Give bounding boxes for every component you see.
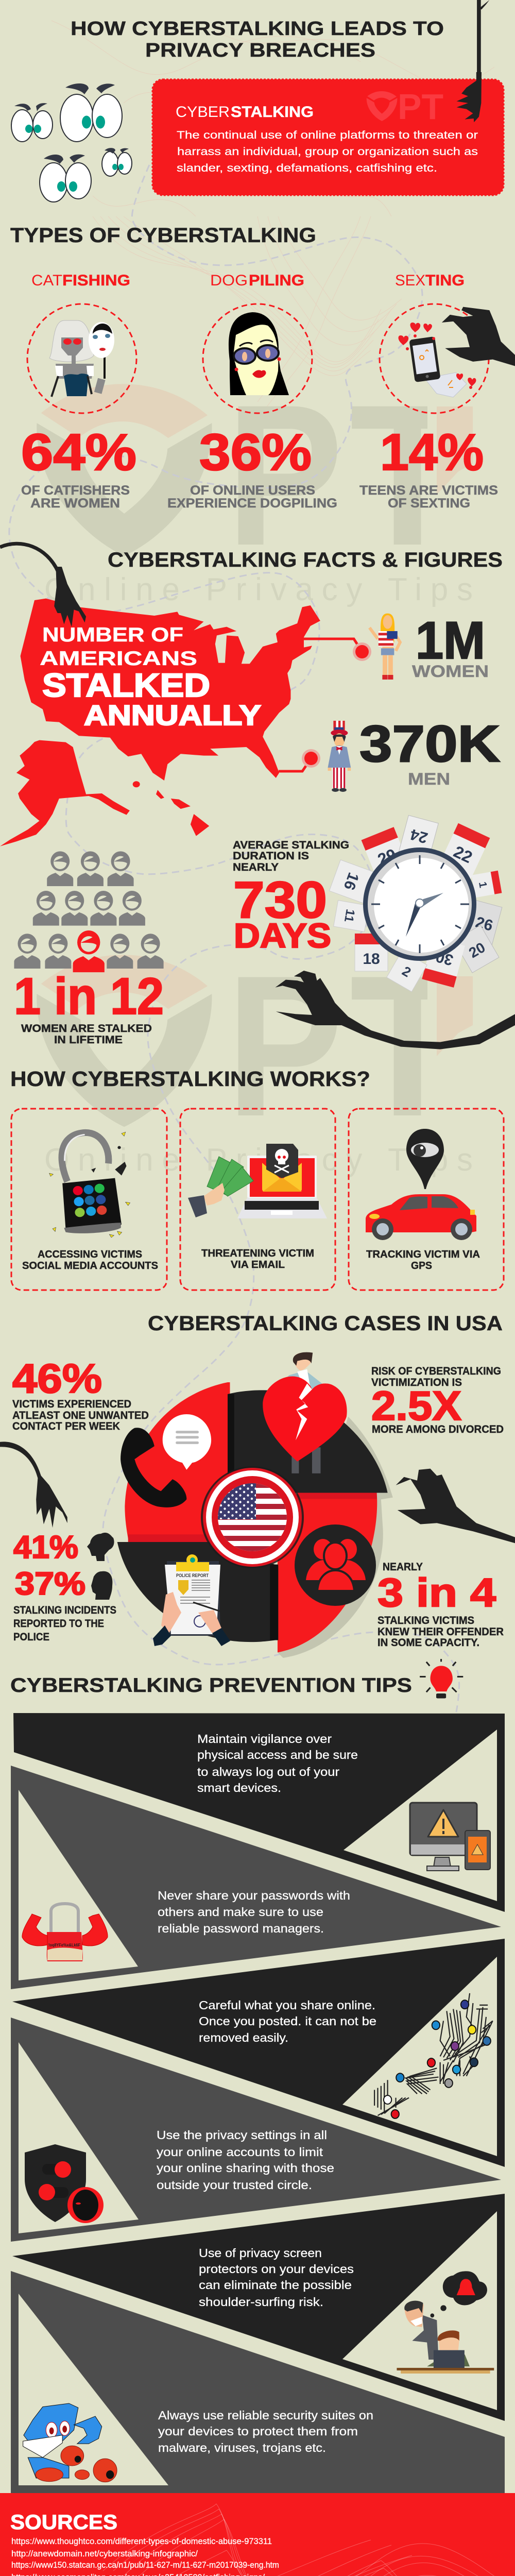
stat: 3 in 4: STALKING VICTIMS [377, 1615, 474, 1626]
panel: tip 5: Use of privacy screen [199, 2246, 322, 2260]
panel: sources: https://www.thoughtco.com/different-types-of-domestic-abuse-973311 [11, 2536, 272, 2546]
panel: tip 6 [11, 2271, 505, 2494]
stat: 3 in 4: IN SOME CAPACITY. [377, 1637, 479, 1649]
icon: privacy shield with toggles and mask [25, 2144, 104, 2223]
panel: tip 3 [12, 1939, 505, 2167]
panel: tip 3: Once you posted. it can not be [199, 2014, 376, 2028]
stat: 2.5X: MORE AMONG DIVORCED [372, 1423, 504, 1435]
icon: clock with calendars: 24 [408, 825, 430, 846]
icon: uncle sam figure [328, 721, 351, 792]
watermark: first OPT logo [37, 363, 473, 587]
icon: sexting phone [380, 304, 489, 413]
panel: cyberstalking definition: PT [398, 87, 443, 127]
panel: sources: http://anewdomain.net/cyberstalking-infographic/ [11, 2549, 198, 2558]
panel: tip 1 [13, 1713, 505, 1912]
icon: angry eyes group [11, 83, 132, 202]
panel: tip 1: Maintain vigilance over [197, 1732, 332, 1745]
panel: tip 2: Never share your passwords with [158, 1889, 350, 1902]
panel: sources: SOURCES [10, 2511, 117, 2534]
stat: 2.5X: VICTIMIZATION IS [371, 1377, 462, 1388]
panel: cyberstalking definition [152, 79, 504, 195]
panel: tip 6: Always use reliable security suites on [158, 2409, 373, 2422]
icon: clock with calendars: 2 [400, 963, 414, 980]
panel: tip 4: outside your trusted circle. [157, 2178, 312, 2192]
pointer: men [279, 749, 320, 771]
icon: woman head silhouette [87, 1533, 114, 1561]
panel: tip 4: your online sharing with those [157, 2161, 334, 2175]
pointer: women [304, 639, 371, 661]
icon: shoulder surfer [397, 2271, 494, 2374]
title [71, 18, 444, 61]
panel: cyberstalking definition: The continual use of online platforms to threaten or [177, 129, 478, 141]
icon: US flag badge [201, 1466, 304, 1568]
stat: 370K men: MEN [408, 770, 450, 788]
icon: speech bubble [163, 1414, 211, 1470]
stat: 14 percent [359, 423, 498, 511]
map caption: NUMBER OF [42, 624, 183, 646]
icon: dogpiling woman [203, 304, 312, 413]
watermark: first OPT logo: T [350, 363, 465, 587]
panel: accessing accounts: SOCIAL MEDIA ACCOUNTS [22, 1260, 158, 1272]
stat: 3 in 4: KNEW THEIR OFFENDER [377, 1626, 504, 1638]
icon: clock with calendars: 22 [451, 842, 475, 867]
stat: 36 percent: 36% [199, 423, 312, 481]
heading: facts and figures: CYBERSTALKING FACTS & FIGURES [108, 549, 503, 571]
watermark: first OPT logo: P [227, 363, 343, 587]
icon: claw under clock [275, 971, 515, 1049]
type heading: dogpiling: DOG [210, 272, 248, 289]
panel: tip 3: Careful what you share online. [199, 1998, 375, 2012]
stat: 36 percent [167, 423, 337, 511]
stat: 1 in 12: IN LIFETIME [54, 1034, 123, 1046]
icon: telephone handset [121, 1428, 186, 1507]
stat: 3 in 4: NEARLY [383, 1561, 423, 1573]
panel: tip 2: others and make sure to use [158, 1905, 323, 1919]
stat: 1M women: 1M [416, 611, 485, 670]
stat: 36 percent: OF ONLINE USERS [190, 483, 315, 498]
stat: 64 percent: 64% [21, 423, 136, 481]
panel: cyberstalking definition: CYBER [176, 104, 230, 121]
stat: 2.5X: RISK OF CYBERSTALKING [371, 1365, 501, 1377]
watermark: second OPT logo: T [350, 934, 465, 1158]
stat: 1 in 12: WOMEN ARE STALKED [21, 1023, 152, 1035]
stat: 36 percent: EXPERIENCE DOGPILING [167, 496, 337, 511]
icon: clock with calendars [329, 815, 502, 992]
icon: clock with calendars: 18 [363, 951, 380, 968]
icon: light bulb [420, 1659, 463, 1699]
stat: 14 percent: OF SEXTING [388, 496, 470, 511]
watermark: first site name: Online Privacy Tips [44, 572, 473, 607]
panel: tip 5: shoulder-surfing risk. [199, 2295, 323, 2309]
title: HOW CYBERSTALKING LEADS TO [71, 18, 444, 40]
panel: tip 1: smart devices. [197, 1781, 281, 1794]
panel: tip 2: reliable password managers. [158, 1922, 324, 1935]
map caption: STALKED [42, 667, 210, 704]
panel: threatening via email: THREATENING VICTIM [201, 1248, 314, 1259]
panel: tip 4: Use the privacy settings in all [157, 2128, 327, 2142]
panel: tip 5: protectors on your devices [199, 2262, 354, 2276]
panel: tip 4 [11, 2018, 501, 2242]
stat: 14 percent: 14% [380, 423, 484, 481]
type heading: catfishing [31, 272, 130, 289]
icon: monitor and phone warning [410, 1803, 490, 1871]
panel: tip 5: can eliminate the possible [199, 2278, 352, 2292]
stat: 64 percent: OF CATFISHERS [21, 483, 130, 498]
panel: cyberstalking definition: harrass an individual, group or organization such as [177, 146, 478, 158]
panel: sources: https://www150.statcan.gc.ca/n1/pub/11-627-m/11-627-m2017039-eng.htm [11, 2560, 279, 2570]
panel: tracking via GPS: GPS [411, 1260, 432, 1272]
panel: tip 1: physical access and be sure [197, 1748, 358, 1761]
stat: 730 days: NEARLY [233, 861, 279, 873]
panel: tracking via GPS: TRACKING VICTIM VIA [366, 1249, 480, 1260]
icon: police report clipboard [153, 1554, 230, 1646]
stat: police reports: 37% [15, 1566, 85, 1602]
watermark: second site name: Online Privacy Tips [44, 1142, 473, 1178]
icon: catfishing robot with mask [27, 304, 136, 413]
panel: cyberstalking definition: STALKING [231, 104, 314, 121]
stat: 2.5X: 2.5X [371, 1383, 461, 1429]
panel: threatening via email [180, 1109, 335, 1290]
icon: security robot and bugs [23, 2403, 117, 2482]
icon: claw right [396, 1469, 515, 1543]
chart: quadrant disc [117, 1352, 393, 1658]
stat: 64 percent [21, 423, 136, 511]
panel: tip 1: to always log out of your [197, 1765, 339, 1778]
stat: 46 percent [12, 1355, 149, 1432]
stat: 730 days [233, 839, 349, 955]
icon: woman figure [370, 614, 400, 680]
stat: police reports: 41% [13, 1530, 78, 1565]
watermark: second OPT logo [37, 934, 473, 1158]
panel: tip 5 [12, 2194, 505, 2421]
stat: 46 percent: ATLEAST ONE UNWANTED [12, 1410, 149, 1421]
icon: laptop with threat envelope and money [188, 1144, 327, 1218]
map caption [40, 624, 261, 731]
stat: police reports: STALKING INCIDENTS [13, 1604, 116, 1616]
icon: broken padlock [49, 1132, 130, 1238]
panel: tip 2 [11, 1766, 501, 1989]
icon: clock with calendars: 30 [434, 948, 455, 969]
panel: tip 3: removed easily. [199, 2031, 288, 2044]
icon: clock with calendars: 26 [474, 913, 495, 935]
type heading: sexting: TING [425, 272, 465, 289]
type heading: sexting [395, 272, 465, 289]
icon: man head silhouette [91, 1571, 112, 1600]
title: PRIVACY BREACHES [145, 40, 375, 61]
icon: black claw [442, 307, 515, 366]
icon: claw on map [0, 544, 86, 627]
icon: clock with calendars: 16 [340, 870, 362, 892]
heading: prevention tips: CYBERSTALKING PREVENTION TIPS [10, 1674, 412, 1697]
stat: 14 percent: TEENS ARE VICTIMS [359, 483, 498, 498]
watermark: second OPT logo: P [227, 934, 343, 1158]
icon: claw left [0, 1442, 67, 1528]
map caption: ANNUALLY [84, 699, 261, 731]
pictogram: women figures [14, 851, 164, 972]
icon: clock with calendars: 11 [341, 908, 357, 923]
stat: 2.5X [371, 1365, 504, 1435]
stat: 730 days: DAYS [234, 917, 331, 955]
panel: accessing accounts [11, 1109, 167, 1290]
stat: 3 in 4 [377, 1561, 504, 1649]
stat: 64 percent: ARE WOMEN [30, 496, 120, 511]
stat: 370K men: 370K [359, 715, 500, 773]
icon: police report clipboard: POLICE REPORT [176, 1573, 209, 1578]
type heading: sexting: SEX [395, 272, 425, 289]
icon: clock with calendars: 20 [466, 939, 488, 961]
icon: circuit foot [374, 1993, 493, 2119]
type heading: catfishing: FISHING [62, 272, 130, 289]
stat: 1 in 12: 1 in 12 [14, 968, 164, 1025]
icon: clock with calendars: 1 [476, 881, 489, 889]
panel: tip 6: your devices to protect them from [158, 2425, 358, 2438]
stat: 730 days: DURATION IS [233, 850, 309, 862]
type heading: catfishing: CAT [31, 272, 62, 289]
heading: types of cyberstalking: TYPES OF CYBERSTALKING [10, 224, 316, 247]
panel: cyberstalking definition: slander, sexting, defamations, catfishing etc. [177, 162, 437, 174]
icon: person with broken heart [263, 1352, 347, 1473]
map caption: AMERICANS [40, 648, 197, 670]
heading: how cyberstalking works: HOW CYBERSTALKING WORKS? [10, 1067, 370, 1091]
panel: tip 6: malware, viruses, trojans etc. [158, 2441, 326, 2454]
stat: police reports [13, 1530, 116, 1643]
stat: 46 percent: 46% [12, 1355, 102, 1401]
panel: sources [0, 2493, 515, 2576]
panel: accessing accounts: ACCESSING VICTIMS [38, 1249, 142, 1260]
icon: red car [366, 1194, 476, 1240]
stat: 730 days: AVERAGE STALKING [233, 839, 349, 851]
icon: eye location pin [406, 1129, 444, 1189]
stat: police reports: POLICE [13, 1631, 49, 1643]
type heading: dogpiling [210, 272, 304, 289]
icon: hanging claw [457, 0, 489, 122]
dashed route line [9, 165, 459, 1712]
map of USA [0, 599, 320, 846]
icon: clock with calendars: 29 [375, 845, 399, 869]
icon: muscular padlock: !oq8YFe%x&Lk6F [48, 1943, 80, 1947]
stat: 46 percent: VICTIMS EXPERIENCED [12, 1398, 131, 1410]
panel: tip 4: your online accounts to limit [157, 2145, 323, 2159]
panel: threatening via email: VIA EMAIL [231, 1259, 285, 1270]
stat: 370K men [359, 715, 500, 788]
icon: group of people [295, 1524, 376, 1606]
stat: 1M women: WOMEN [412, 662, 489, 681]
panel: tracking via GPS [349, 1109, 504, 1290]
stat: police reports: REPORTED TO THE [13, 1618, 104, 1630]
stat: 730 days: 730 [233, 871, 327, 929]
type heading: dogpiling: PILING [249, 272, 304, 289]
heading: cases in USA: CYBERSTALKING CASES IN USA [148, 1312, 503, 1335]
stat: 46 percent: CONTACT PER WEEK [12, 1420, 120, 1432]
stat: 3 in 4: 3 in 4 [377, 1570, 496, 1615]
icon: muscular padlock [22, 1904, 108, 1961]
